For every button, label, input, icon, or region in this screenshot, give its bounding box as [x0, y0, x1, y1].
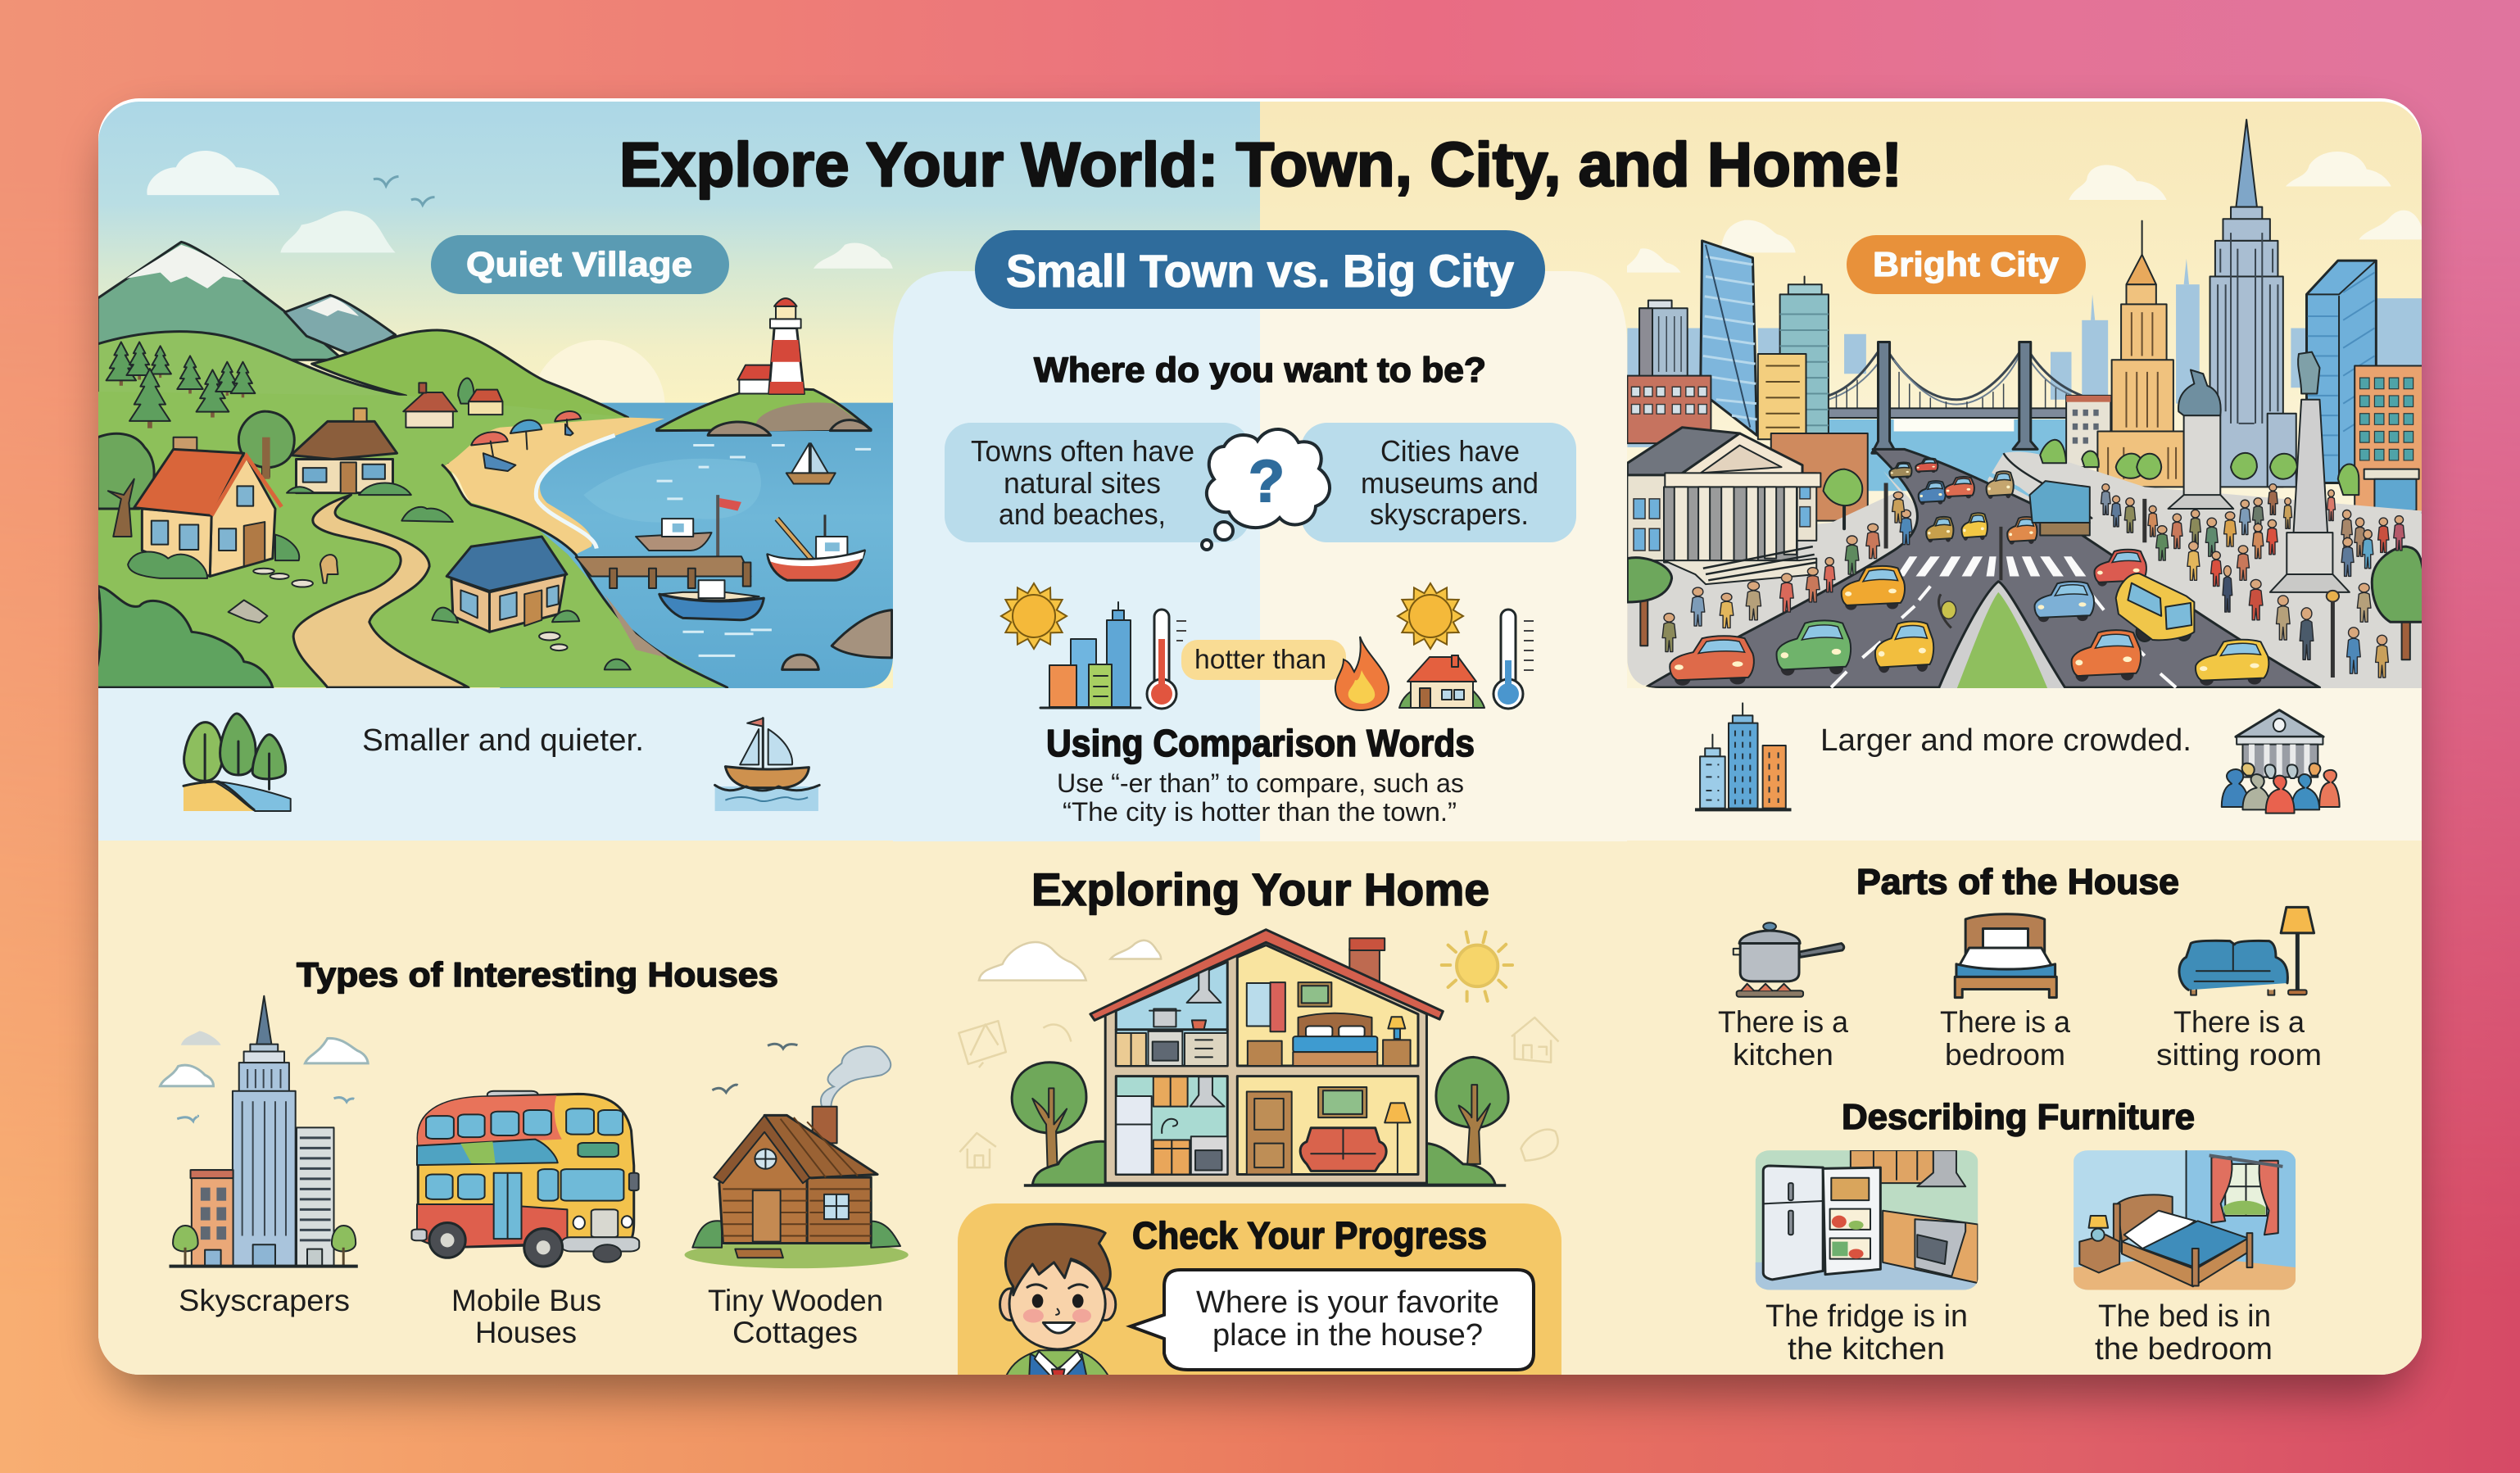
text: comparison explanation: “The city is hotter than the town.” — [1063, 797, 1457, 827]
bubble: towns: natural sites — [1004, 466, 1161, 500]
bubble: cities — [1301, 423, 1576, 542]
heading: exploring your home: Exploring Your Home — [1031, 863, 1489, 915]
title: Explore Your World: Town, City, and Home! — [619, 130, 1902, 200]
icon: bed — [1955, 914, 2056, 998]
heading: types of interesting houses: Types of Interesting Houses — [297, 955, 778, 994]
panel: check your progress — [1000, 1214, 1534, 1380]
icon: trees and river — [184, 714, 291, 811]
captions: parts of the house — [1718, 1005, 2322, 1072]
icon: sofa and lamp — [2179, 907, 2314, 995]
captions: parts of the house: bedroom — [1945, 1038, 2065, 1072]
card drop shadow — [107, 123, 2413, 1394]
speech bubble: Where is your favorite — [1196, 1285, 1499, 1320]
captions: house types: Skyscrapers — [179, 1284, 350, 1317]
pill: small town vs big city: Small Town vs. Big City — [1006, 245, 1514, 297]
captions: parts of the house: There is a — [1718, 1005, 1848, 1039]
bubble: towns: and beaches, — [999, 497, 1166, 531]
text: comparison explanation: Use “-er than” to compare, such as — [1057, 768, 1464, 798]
icon: thought cloud with question mark — [1202, 429, 1330, 550]
icon: city buildings — [1040, 602, 1140, 708]
captions: describing furniture: The bed is in — [2098, 1299, 2271, 1334]
speech bubble — [1131, 1270, 1534, 1370]
icon: museum and crowd — [2222, 710, 2340, 814]
heading: parts of the house: Parts of the House — [1856, 862, 2179, 902]
right scene: bright city — [1622, 120, 2427, 690]
picture: fridge in the kitchen — [1756, 1150, 1978, 1290]
bubble: cities: Cities have — [1380, 434, 1520, 468]
check-your-progress backing panel — [958, 1203, 1561, 1375]
icon: hot thermometer — [1147, 610, 1186, 709]
icon: sailboat — [715, 718, 819, 811]
picture: bed in the bedroom — [2074, 1150, 2296, 1290]
icon: cool thermometer — [1493, 610, 1534, 709]
icon: thought cloud with question mark: ? — [1249, 449, 1285, 514]
bubble: towns — [945, 423, 1250, 542]
comparison icons row — [1001, 583, 1534, 710]
character: smiling boy — [1000, 1224, 1116, 1380]
text: comparison explanation — [1057, 768, 1464, 827]
captions: house types: Cottages — [732, 1316, 858, 1349]
bubble: cities: museums and — [1361, 466, 1539, 500]
heading: where do you want to be: Where do you want to be? — [1034, 351, 1486, 390]
heading: describing furniture: Describing Furniture — [1842, 1097, 2195, 1137]
heading: using comparison words: Using Comparison Words — [1046, 722, 1475, 764]
pill: bright city: Bright City — [1873, 245, 2060, 283]
captions: parts of the house: sitting room — [2156, 1038, 2322, 1072]
captions: house types: Mobile Bus — [451, 1284, 601, 1317]
captions: describing furniture — [1765, 1299, 2273, 1366]
pill: hotter than — [1181, 640, 1346, 680]
pill: small town vs big city — [975, 230, 1545, 309]
captions: describing furniture: the bedroom — [2095, 1332, 2273, 1366]
captions: parts of the house: There is a — [1940, 1005, 2070, 1039]
icon: double decker bus — [411, 1091, 639, 1267]
caption: larger and more crowded: Larger and more crowded. — [1820, 723, 2191, 758]
left scene: quiet village — [82, 151, 897, 689]
pill: quiet village: Quiet Village — [466, 245, 692, 283]
icon: sun over city — [1001, 583, 1067, 649]
illustration: house cross-section — [959, 930, 1559, 1185]
icon: flame — [1335, 637, 1389, 710]
captions: house types — [179, 1284, 883, 1349]
heading: check your progress: Check Your Progress — [1132, 1214, 1487, 1257]
icon: cooking pot — [1734, 922, 1844, 997]
pill: bright city — [1847, 235, 2086, 294]
captions: describing furniture: the kitchen — [1788, 1332, 1945, 1366]
speech bubble: place in the house? — [1212, 1318, 1483, 1353]
caption: smaller and quieter: Smaller and quieter. — [362, 723, 644, 758]
icon: town house — [1399, 655, 1484, 708]
pill: quiet village — [431, 235, 729, 294]
bubble: cities: skyscrapers. — [1370, 497, 1529, 531]
captions: house types: Tiny Wooden — [708, 1284, 883, 1317]
icon: skyscrapers — [160, 996, 368, 1267]
icon: sun over town — [1398, 583, 1463, 649]
icon: city towers — [1695, 703, 1792, 809]
captions: parts of the house: There is a — [2173, 1005, 2305, 1039]
icon: wooden cabin — [685, 1044, 909, 1268]
pill: hotter than: hotter than — [1194, 644, 1326, 674]
bubble: towns: Towns often have — [971, 434, 1194, 468]
captions: describing furniture: The fridge is in — [1765, 1299, 1968, 1334]
captions: parts of the house: kitchen — [1733, 1038, 1833, 1072]
center comparison panel — [893, 271, 1627, 841]
captions: house types: Houses — [475, 1316, 577, 1349]
